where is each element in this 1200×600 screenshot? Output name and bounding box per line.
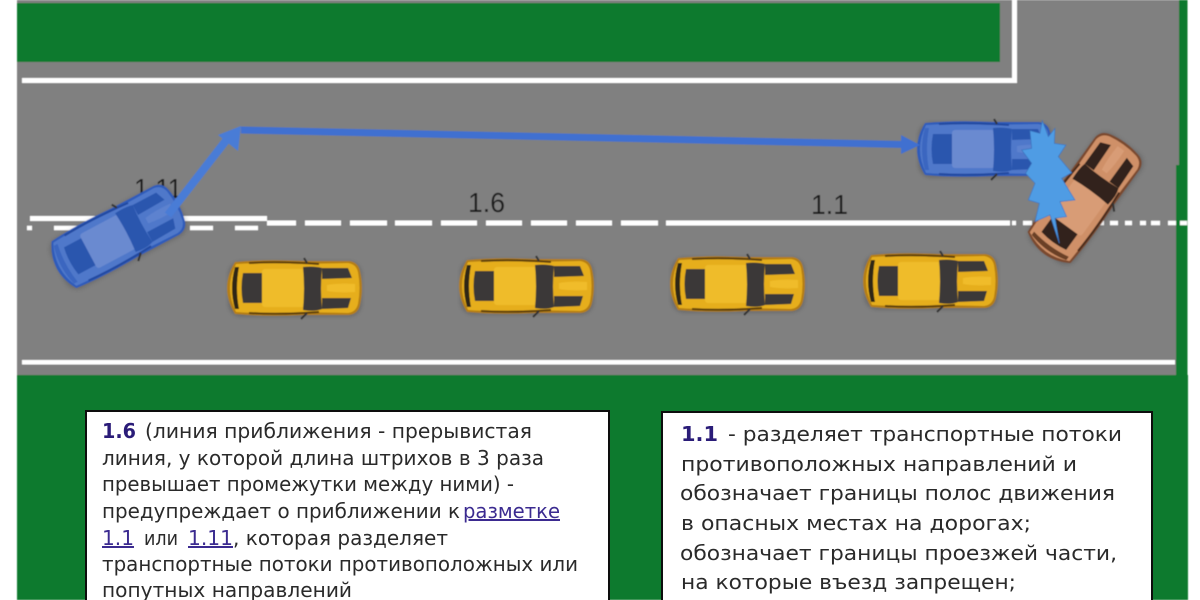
panel: marking 1.1 description: обозначает границы проезжей части, [680,541,1117,565]
term 1.1: 1.1 [681,422,718,446]
green verge bottom [17,375,1188,600]
label 1.6: 1.6 [468,187,505,218]
panel: marking 1.1 description: - разделяет транспортные потоки [728,422,1122,446]
marking 1.6 approach line [267,220,658,226]
yellow car 1 [227,258,362,319]
panel: marking 1.6 description: , которая разделяет [233,526,448,550]
label 1.1: 1.1 [811,189,848,220]
brown car [1019,125,1151,273]
panel: marking 1.6 description: превышает промежутки между ними) - [102,472,514,496]
panel: marking 1.6 description: 1.11 [188,526,233,550]
panel: marking 1.1 description [662,412,1152,600]
blue car at collision [917,119,1052,180]
marking 1.1 solid line [666,220,1010,226]
term 1.6: 1.6 [102,419,136,443]
marking 1.11 solid line [30,216,267,221]
panel: marking 1.1 description: на которые въезд запрещен; [681,570,1016,594]
marking 1.11 dashed line [27,226,258,230]
panel: marking 1.6 description: предупреждает о приближении к [102,499,460,523]
top road edge line [22,0,1014,80]
dotted line right [1012,221,1187,225]
yellow car 4 [863,251,998,312]
panel: marking 1.6 description: разметке [463,499,560,523]
panel: marking 1.6 description: (линия приближения - прерывистая [145,419,532,443]
road surface [17,0,1179,376]
green verge top [17,3,1000,62]
panel: marking 1.6 description: транспортные потоки противоположных или [102,552,578,576]
panel: marking 1.1 description: обозначает границы полос движения [680,481,1115,505]
arrow: move out to oncoming lane [168,126,241,215]
arrow: oncoming lane path [241,130,920,154]
yellow car 3 [670,254,805,315]
panel: marking 1.6 description: 1.1 [102,526,134,550]
label 1.11: 1.11 [134,173,182,204]
panel: marking 1.1 description: противоположных направлений и [681,452,1077,476]
green verge right [1176,0,1188,376]
panel: marking 1.1 description: в опасных местах на дорогах; [681,511,1031,535]
panel: marking 1.6 description: или [144,526,178,550]
panel: marking 1.6 description: линия, у которой длина штрихов в 3 раза [102,446,544,470]
icon: collision burst [1022,121,1075,243]
bottom road edge line [22,360,1175,364]
panel: marking 1.6 description [86,411,609,600]
blue car overtaking [42,177,193,296]
yellow car 2 [459,256,594,317]
